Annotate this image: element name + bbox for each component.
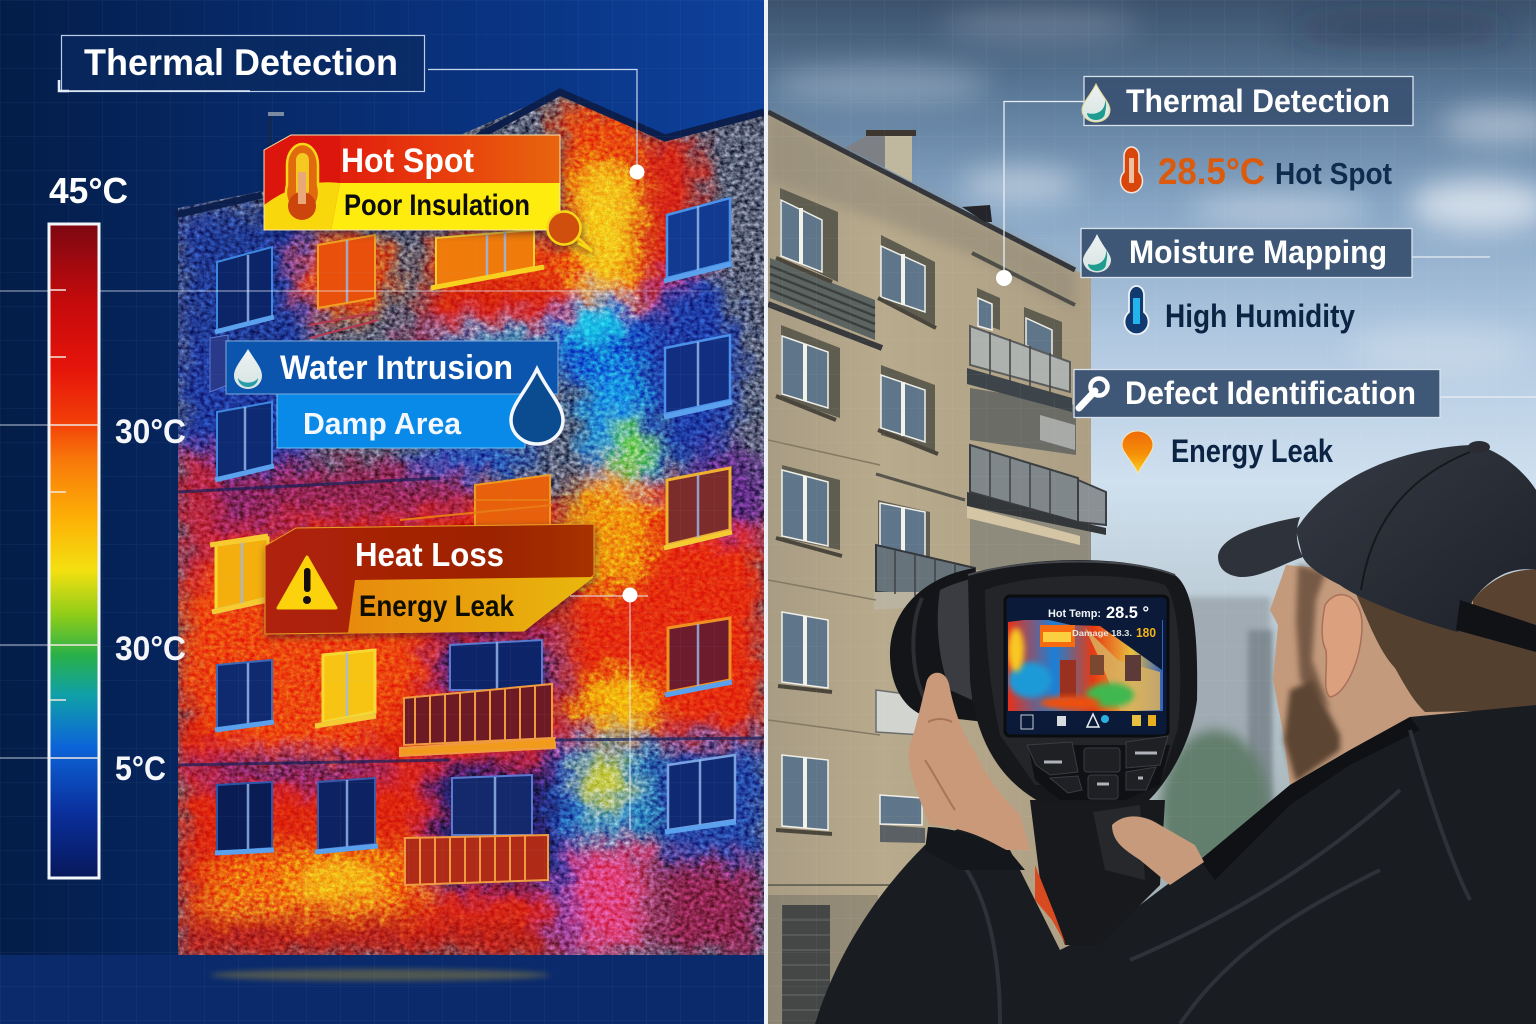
text: Moisture Mapping: Moisture Mapping [1129,234,1387,270]
photo window recesses [780,188,1062,585]
reading: high humidity [1125,286,1355,334]
distant building [1185,597,1272,827]
screen orange value: 180 [1136,625,1156,640]
label: Thermal Detection bar [1082,76,1413,126]
thermal windows [210,198,736,853]
connector: heat loss to wall [570,588,648,830]
thermal balconies [310,267,555,885]
sideburn [1296,565,1330,710]
roof edges [175,92,764,215]
icon: map pin [1122,431,1153,473]
text: hot spot: Hot Spot [1275,156,1392,191]
ear [1322,595,1362,697]
right wing recesses [970,388,1076,455]
temperature scale [49,170,186,878]
text: Damp Area: Damp Area [303,406,462,441]
chimney [845,136,885,168]
text: Energy Leak: Energy Leak [359,590,514,623]
cap [1218,441,1536,652]
guide lines [0,291,720,758]
text: Thermal Detection: Thermal Detection [1126,83,1390,119]
scale label upper 30: 30°C [115,413,186,451]
text: High Humidity: High Humidity [1165,298,1355,334]
icon: small drop [234,349,262,389]
vent slats [768,258,882,348]
icon: magnifier pointer [548,212,592,251]
jacket [815,705,1536,1024]
icon: drop [1082,84,1110,122]
text: Defect Identification: Defect Identification [1125,375,1416,411]
connector: title to wall [428,70,644,180]
icon: red thermometer [1120,147,1143,193]
panel: thermal view of building [0,0,765,1024]
connector: photo title to wall [996,102,1084,286]
callout: heat loss [265,524,594,634]
thermal camera [890,560,1204,945]
text: Hot Spot: Hot Spot [341,142,474,180]
screen readout: Hot Temp: [1048,608,1101,620]
icon: drop [1083,234,1111,272]
thermal building [170,90,765,960]
reading: energy leak [1122,431,1333,473]
body [968,560,1197,802]
left hand [909,673,1030,870]
text: Water Intrusion: Water Intrusion [280,349,513,387]
beard [1284,680,1340,782]
title box: Thermal Detection [59,36,424,92]
scale label 5: 5°C [115,750,166,788]
lens [890,568,985,722]
text: temperature: 28.5°C [1158,151,1265,192]
icon: thermometer [286,144,319,220]
icon: large drop [511,369,563,444]
hair [1352,585,1536,712]
photo windows [781,200,1052,830]
screen [1005,596,1168,736]
text: Energy Leak: Energy Leak [1171,433,1333,469]
callout: water intrusion [226,341,563,448]
icon: blue thermometer [1125,286,1148,334]
camera buttons [1027,736,1168,799]
reading: 28.5 hot spot [1120,147,1392,193]
icon: warning triangle [278,557,336,608]
screen icons [1021,714,1156,729]
scale label lower 30: 30°C [115,630,186,668]
label: Defect Identification bar [1074,370,1536,418]
text: Poor Insulation: Poor Insulation [344,189,530,222]
handle [1030,800,1165,945]
clouds [770,9,1536,376]
person: thermographer [815,441,1536,1024]
scale label 45: 45°C [49,170,128,211]
callout: hot spot [264,135,592,251]
text: Heat Loss: Heat Loss [355,536,504,573]
right hand [1112,816,1204,885]
photo building [768,112,1106,1024]
screen secondary readout: Damage 18.3. [1072,629,1132,638]
head and neck [1270,565,1480,785]
screen temperature: 28.5 ° [1106,603,1149,622]
title box: Thermal Detection: Thermal Detection [84,42,398,83]
photo balconies [874,326,1106,843]
center divider [764,0,768,1024]
label: Moisture Mapping bar [1081,228,1490,278]
icon: wrench [1079,378,1108,408]
panel: real photo view [768,0,1536,1024]
